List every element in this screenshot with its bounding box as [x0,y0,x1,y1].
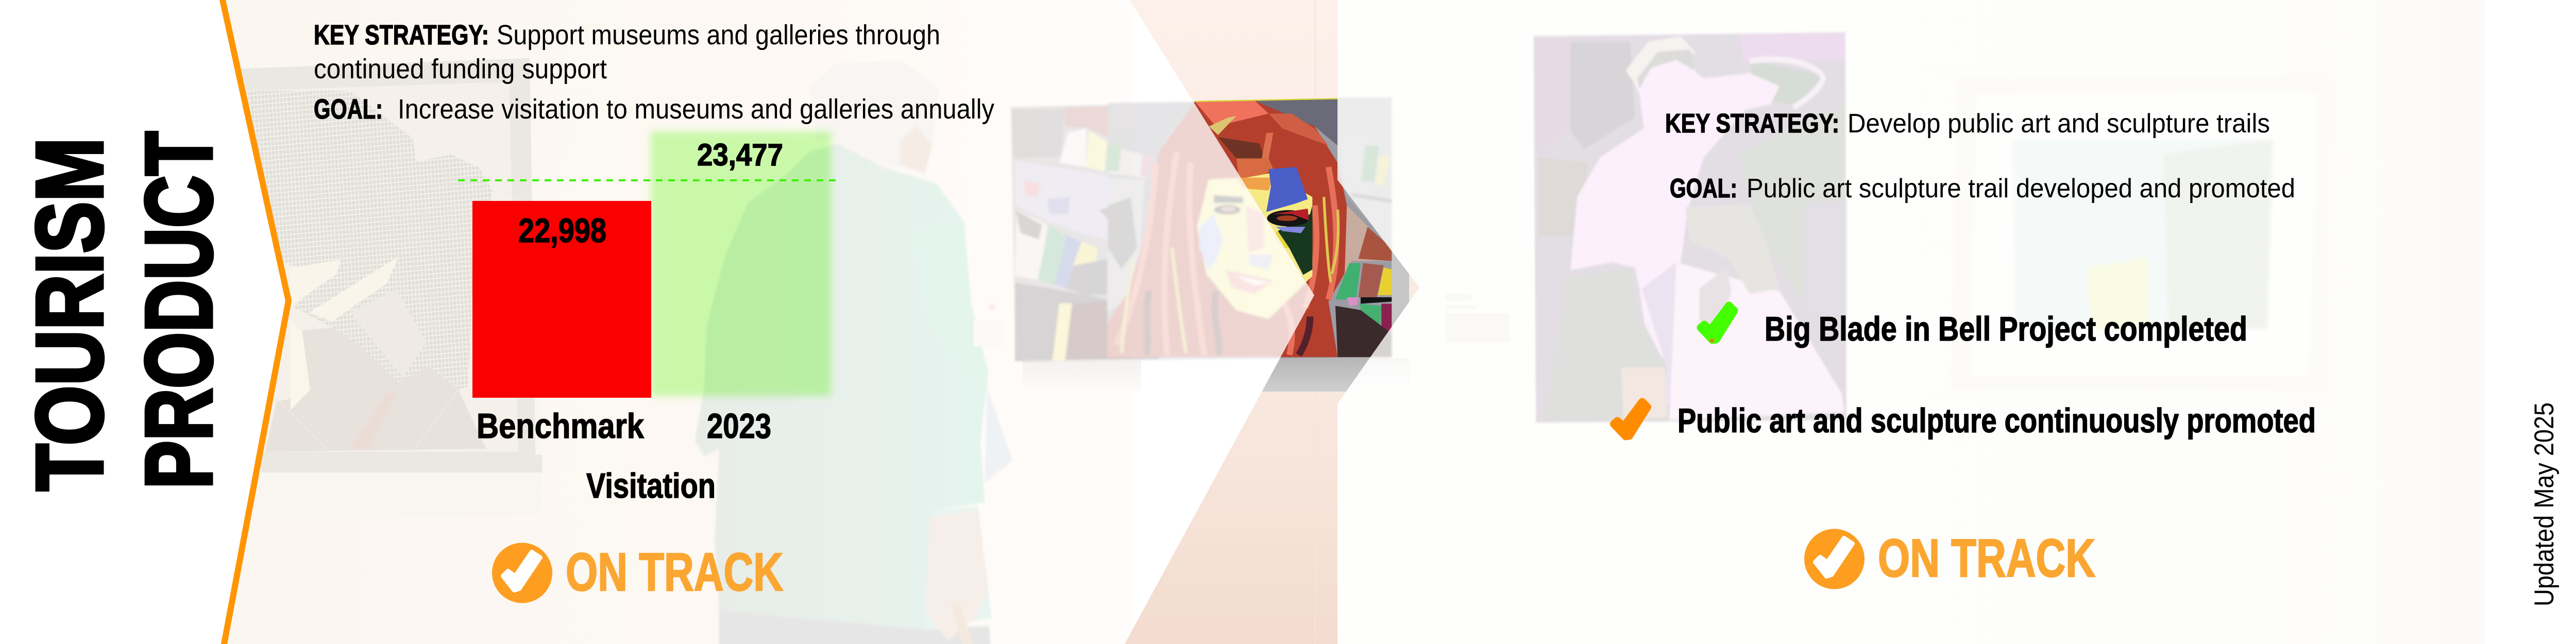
text block: left key strategy and goal: KEY STRATEGY: [314,20,489,50]
axis label: 2023: 2023 [707,406,771,446]
chart title: Visitation: Visitation [586,466,716,505]
bar: benchmark value [472,201,651,398]
text block: left key strategy and goal: GOAL: [314,94,383,125]
text block: right key strategy and goal: Public art sculpture trail developed and promoted [1747,174,2295,204]
text block: left key strategy and goal: continued funding support [314,54,607,84]
photo: faint wall caption [974,303,995,346]
photo: faint wall caption [1446,294,1510,342]
text block: left key strategy and goal [314,20,994,125]
milestone: Big Blade in Bell Project completed: Big Blade in Bell Project completed [1765,310,2247,348]
bar: 2023 value [651,131,831,396]
text block: left key strategy and goal: Support museums and galleries through [497,20,940,50]
icon: green check [1701,306,1734,342]
title: Tourism Product [16,131,231,491]
status: on track left [492,543,783,603]
axis label: Benchmark: Benchmark [477,406,644,446]
icon: orange check badge [492,543,552,603]
text block: right key strategy and goal: KEY STRATEGY: [1665,109,1839,139]
photo: shadow under portrait [1023,361,1141,387]
photo: mosaic artwork [241,58,543,472]
icon: orange check [1614,402,1648,436]
painting: faded portrait right part [1337,97,1393,358]
text block: left key strategy and goal: Increase visitation to museums and galleries annually [398,94,994,125]
icon: orange check badge [1804,529,1865,589]
painting: faded portrait left part [1010,101,1314,362]
value: 23,477: 23,477 [697,138,783,172]
title: Tourism Product: TOURISM [16,138,122,491]
painting: faded embracing figures [1534,32,1846,422]
benchmark line [458,179,839,181]
milestone: Public art and sculpture continuously promoted: Public art and sculpture continuously promoted [1677,401,2316,439]
title: Tourism Product: PRODUCT [126,131,231,489]
value: 22,998: 22,998 [518,211,606,249]
label: ON TRACK: ON TRACK [566,543,783,602]
panel: salmon band with vivid portrait [1125,0,1419,644]
photo: faded framed picture [2016,141,2272,330]
photo: shadow beside portrait [1354,359,1369,381]
footnote: update date: Updated May 2025 [2529,402,2560,606]
panel: title band with orange chevron edge [0,0,289,644]
status: on track right [1804,529,2095,589]
bar chart: visitation [458,131,839,505]
panel: left photo section [222,0,1392,644]
text block: right key strategy and goal [1665,109,2295,204]
photo: visitor from behind [695,126,1012,644]
text block: right key strategy and goal: Develop public art and sculpture trails [1848,109,2270,139]
label: ON TRACK: ON TRACK [1878,529,2095,588]
panel: right photo section [1337,31,2273,423]
text block: right key strategy and goal: GOAL: [1670,174,1737,204]
